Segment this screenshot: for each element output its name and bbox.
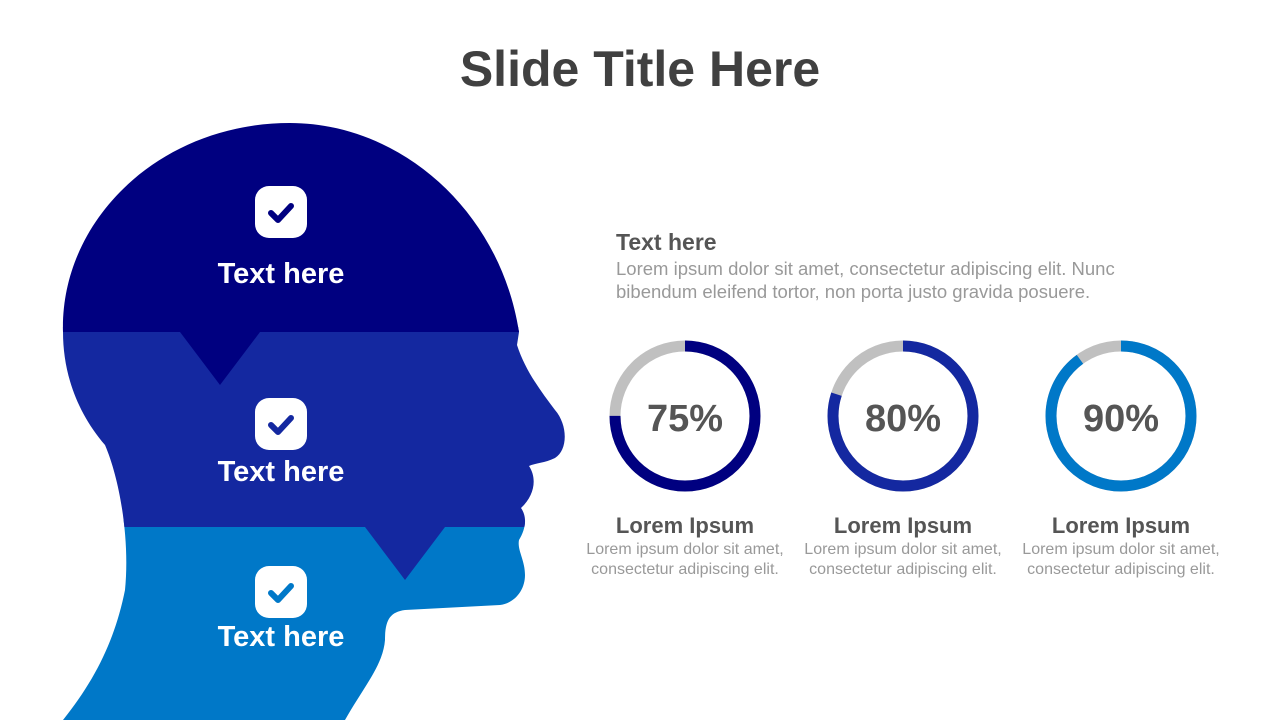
band: top: [62, 123, 519, 385]
head silhouette: [62, 123, 565, 720]
caption 3: [1022, 513, 1220, 578]
band: bottom: [63, 520, 526, 720]
caption 1: [586, 513, 784, 578]
icon: check 2: [255, 398, 307, 450]
donut 75%: [615, 346, 755, 486]
caption 3: Lorem ipsum dolor sit amet,: [1022, 541, 1220, 558]
label 1: Text here: [218, 258, 344, 290]
donut 90%: 90%: [1083, 398, 1159, 440]
donut 90%: [1051, 346, 1191, 486]
text block: Lorem ipsum dolor sit amet, consectetur adipiscing elit. Nunc: [616, 258, 1115, 279]
caption 1: Lorem ipsum dolor sit amet,: [586, 541, 784, 558]
caption 1: Lorem Ipsum: [616, 513, 754, 538]
donut 80%: [833, 346, 973, 486]
caption 2: Lorem ipsum dolor sit amet,: [804, 541, 1002, 558]
donut 80%: 80%: [865, 398, 941, 440]
caption 3: consectetur adipiscing elit.: [1027, 561, 1215, 578]
icon: check 3: [255, 566, 307, 618]
text block: Text here: [616, 229, 717, 255]
label 2: Text here: [218, 456, 344, 488]
caption 2: consectetur adipiscing elit.: [809, 561, 997, 578]
band: middle: [62, 327, 565, 580]
icon: check 1: [255, 186, 307, 238]
text block: [616, 229, 1115, 302]
caption 2: Lorem Ipsum: [834, 513, 972, 538]
caption 1: consectetur adipiscing elit.: [591, 561, 779, 578]
title: Slide Title Here: [460, 41, 820, 97]
caption 2: [804, 513, 1002, 578]
text block: bibendum eleifend tortor, non porta justo gravida posuere.: [616, 281, 1090, 302]
label 3: Text here: [218, 621, 344, 653]
caption 3: Lorem Ipsum: [1052, 513, 1190, 538]
donut 75%: 75%: [647, 398, 723, 440]
